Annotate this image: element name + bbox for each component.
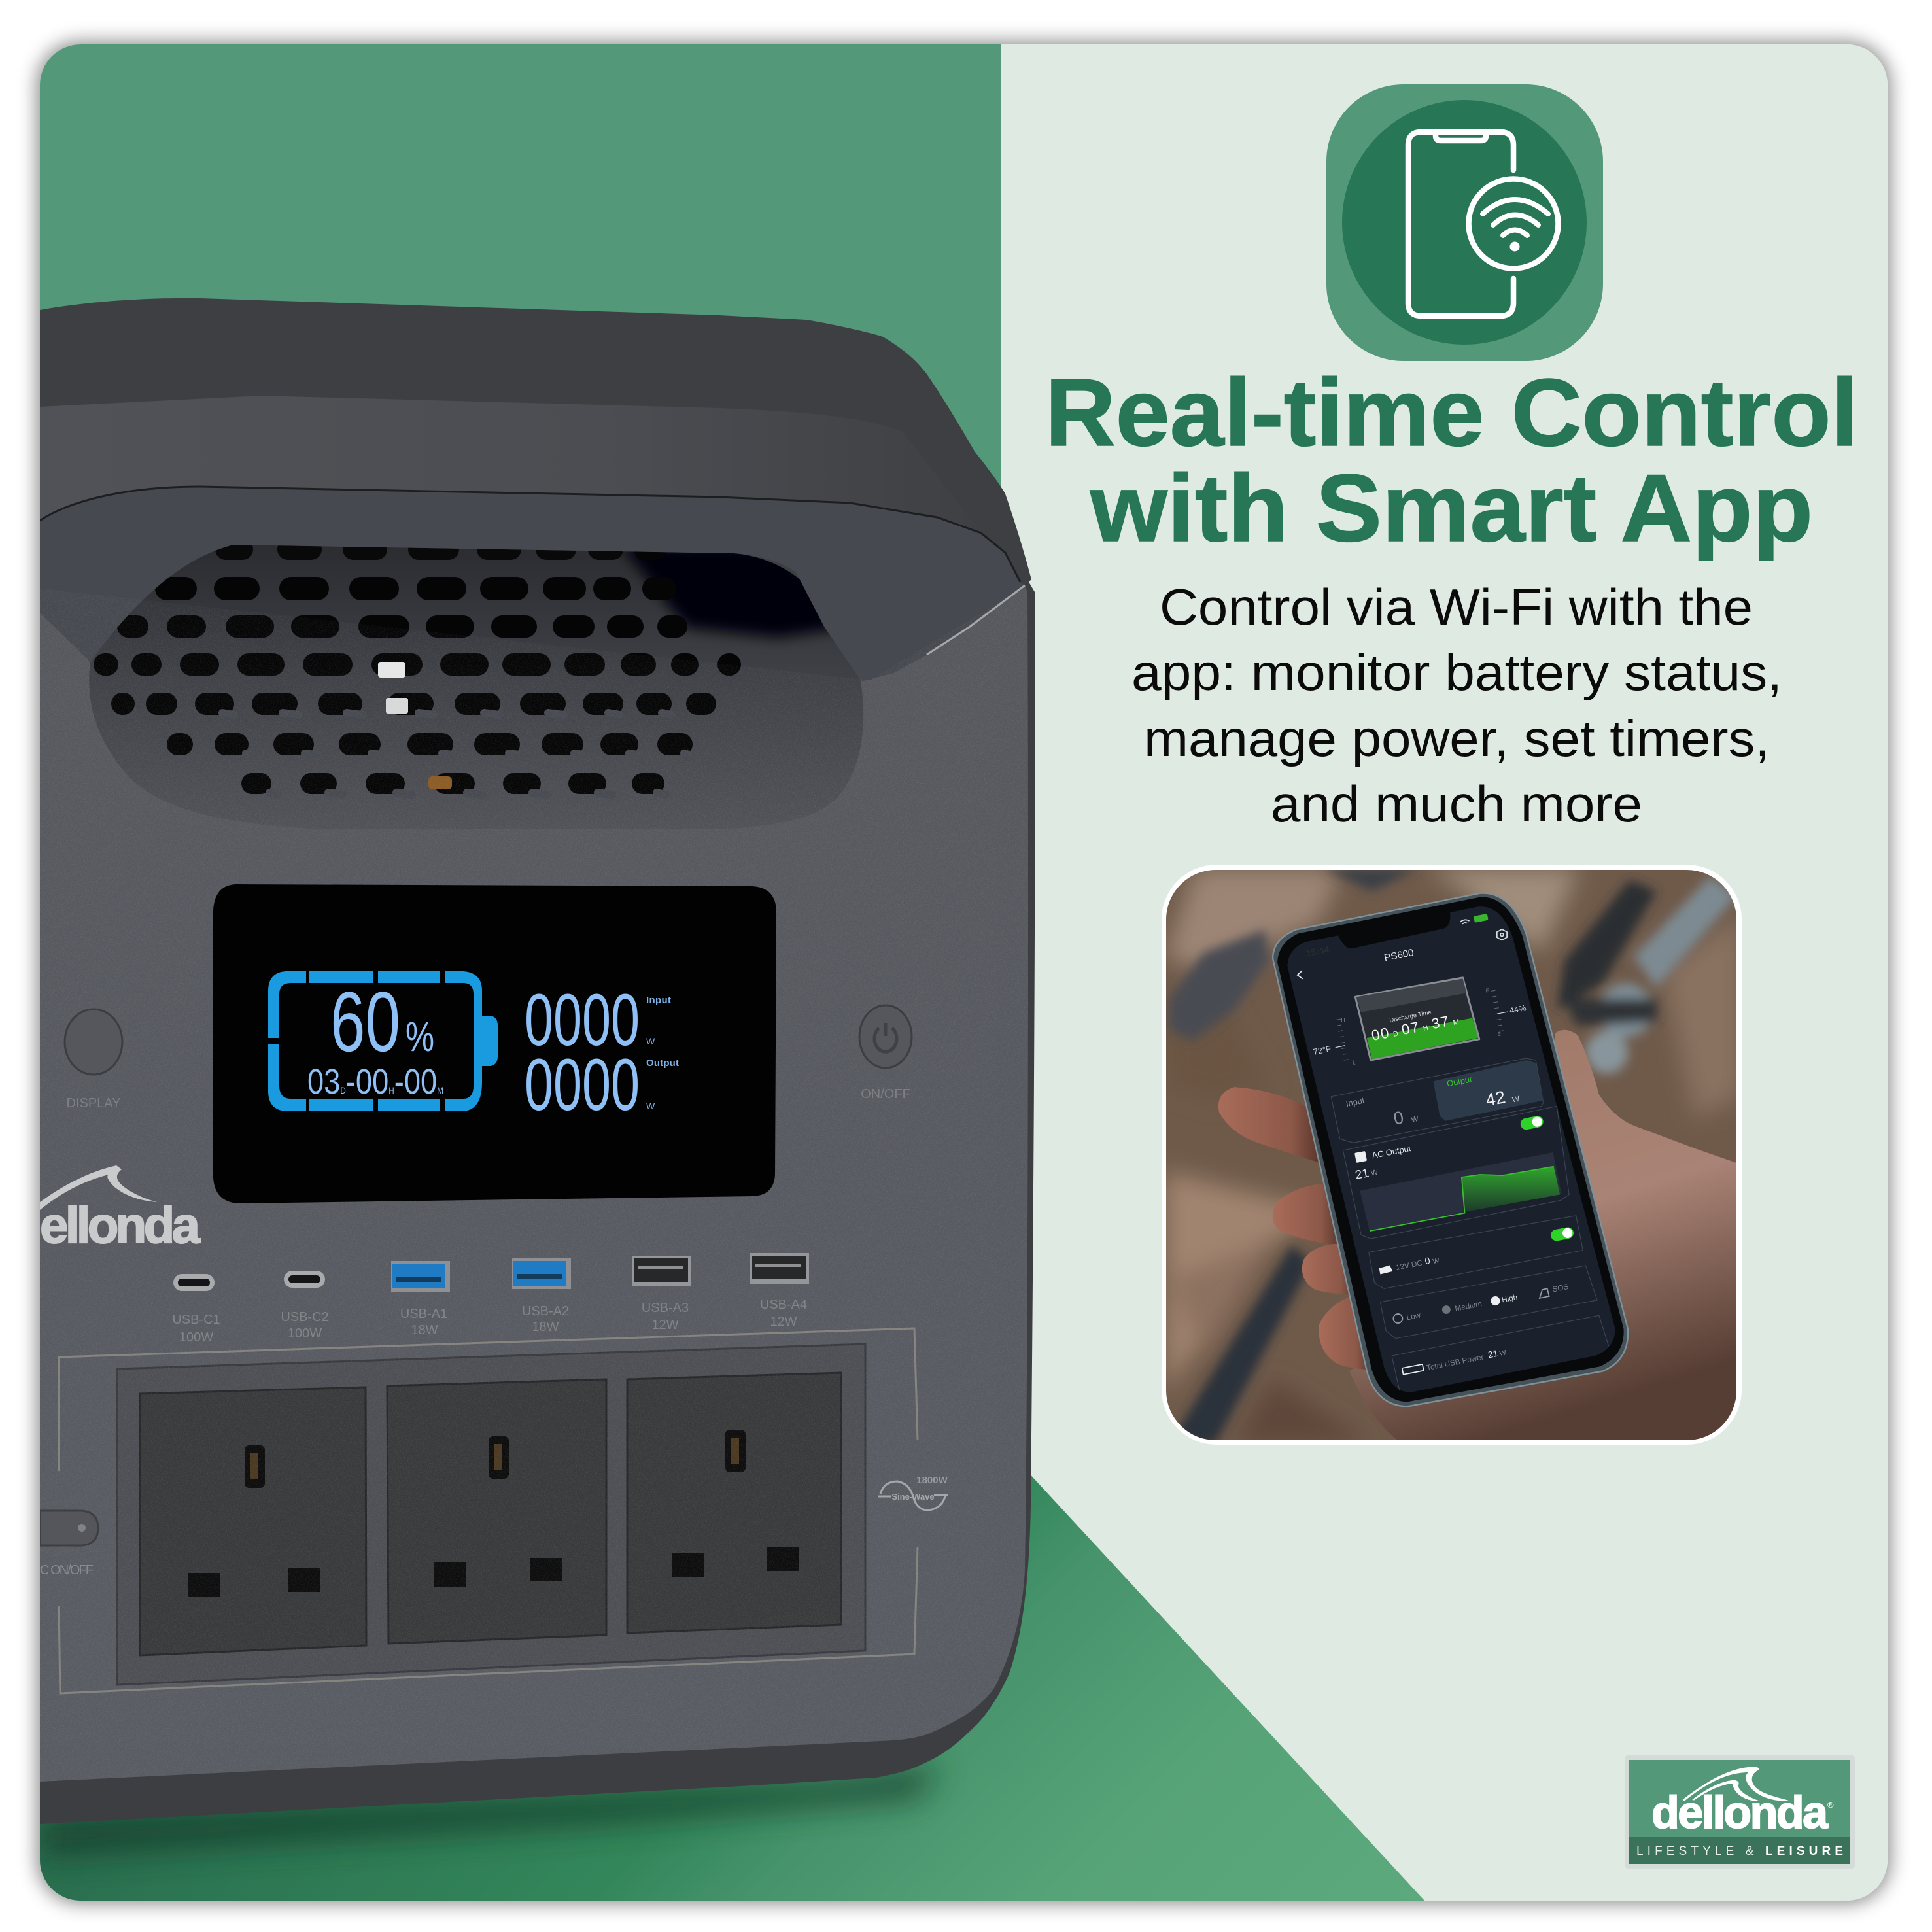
handle surround <box>40 487 1025 681</box>
LCD input reading: 0000 <box>525 979 640 1061</box>
socket 2 <box>387 1379 606 1644</box>
logo tagline: LIFESTYLE & LEISURE <box>1636 1844 1843 1858</box>
hand palm <box>1349 1030 1745 1444</box>
app input output card: W <box>1411 1114 1420 1124</box>
vent recess <box>89 545 863 818</box>
app light modes card: High <box>1501 1293 1518 1304</box>
app input output card <box>1331 1058 1544 1143</box>
phone frame <box>1273 893 1628 1406</box>
panel: pale background right <box>1001 44 1888 1901</box>
LCD percent: 60 <box>330 974 400 1069</box>
LCD remaining time: 03D-00H-00M <box>307 1062 443 1101</box>
app back chevron <box>1298 971 1303 979</box>
app status bar: 15:44 <box>1305 944 1330 959</box>
USB-C port 1 <box>173 1274 215 1291</box>
heading: Real-time Control <box>1045 359 1858 466</box>
handle edge highlight <box>927 585 1025 655</box>
icon: phone with wifi <box>1326 84 1603 361</box>
app temperature gauge <box>1313 1017 1356 1066</box>
photo frame <box>1162 865 1742 1445</box>
icon wifi dot <box>1509 242 1520 251</box>
USB port labels: USB-A2 <box>522 1304 569 1319</box>
USB-A port 3 black <box>632 1256 691 1286</box>
body text: app: monitor battery status, <box>1131 644 1782 701</box>
app input output card: 42 <box>1484 1087 1507 1110</box>
logo wordmark: dellonda <box>1651 1787 1829 1838</box>
USB-A port 4 black <box>750 1253 809 1284</box>
power button label: ON/OFF <box>861 1087 910 1101</box>
product shadow on ground <box>40 1766 942 1857</box>
LCD input unit: W <box>646 1036 655 1046</box>
LCD battery outline <box>268 971 482 1111</box>
app light modes card <box>1380 1266 1597 1339</box>
vent hole lit crescents <box>222 713 692 795</box>
app temperature gauge: 72°F <box>1313 1044 1332 1057</box>
finger 4 <box>1319 1294 1373 1370</box>
LCD output unit: W <box>646 1101 655 1111</box>
phone screen <box>1287 906 1615 1392</box>
device logo <box>40 1165 201 1254</box>
internal white part <box>378 662 405 678</box>
internal orange part <box>428 776 452 789</box>
USB-A port 2 blue <box>512 1258 571 1289</box>
app charge gauge: F <box>1486 988 1489 994</box>
app input output card: Input <box>1345 1095 1366 1109</box>
USB port labels: USB-A4 <box>760 1298 807 1312</box>
app input output card: 0 <box>1392 1107 1406 1129</box>
app input output card: Output <box>1446 1074 1473 1088</box>
app toggle 1 <box>1519 1115 1544 1131</box>
USB-A port 1 blue <box>391 1261 450 1292</box>
product top shell <box>40 298 1031 680</box>
logo wave <box>1683 1767 1789 1801</box>
app AC output card <box>1343 1106 1569 1239</box>
app settings icon <box>1497 929 1507 940</box>
app input output card: W <box>1511 1095 1521 1105</box>
phone bezel <box>1277 897 1624 1402</box>
USB port labels <box>172 1298 807 1345</box>
finger 1 <box>1218 1087 1322 1164</box>
app charge gauge <box>1486 988 1527 1037</box>
brand logo <box>1625 1755 1855 1869</box>
app USB power card <box>1392 1315 1609 1390</box>
power button <box>859 1005 912 1068</box>
LCD percent sign: % <box>405 1013 434 1060</box>
top shell lighter band <box>40 396 805 519</box>
panel: dark green diagonal corner <box>40 1475 1424 1901</box>
app USB power card: W <box>1499 1349 1507 1358</box>
USB port labels: USB-A3 <box>642 1301 689 1315</box>
product base silhouette and bottom band <box>40 576 1035 1824</box>
app charge gauge: 44% <box>1508 1003 1527 1016</box>
app AC output card: W <box>1370 1168 1379 1178</box>
internal white part lower <box>386 698 408 714</box>
app light modes card: Medium <box>1455 1300 1483 1313</box>
USB port labels: 100W <box>179 1330 213 1345</box>
LCD input label: Input <box>646 995 671 1006</box>
USB port labels: 12W <box>651 1318 679 1332</box>
panel: green background left <box>40 44 1001 1901</box>
app status bar <box>1305 914 1489 959</box>
icon badge background <box>1326 84 1603 361</box>
app USB power card: Total USB Power <box>1426 1353 1485 1372</box>
USB port labels: 100W <box>288 1326 322 1341</box>
app battery graphic: 00 D 07 H 37 M <box>1370 1011 1460 1044</box>
body text: Control via Wi-Fi with the <box>1160 578 1753 636</box>
app toggle 2 <box>1550 1226 1575 1242</box>
body text: and much more <box>1271 775 1642 833</box>
body text <box>1131 578 1782 833</box>
logo strip <box>1629 1837 1850 1864</box>
app USB power card: 21 <box>1487 1348 1499 1360</box>
logo panel <box>1629 1760 1850 1864</box>
blurred wooden background <box>1158 857 1759 1458</box>
LCD output reading: 0000 <box>525 1044 640 1126</box>
logo registered mark: ® <box>1827 1800 1834 1810</box>
app light modes card: Low <box>1406 1311 1422 1322</box>
body text: manage power, set timers, <box>1144 710 1770 767</box>
app title: PS600 <box>1383 947 1415 964</box>
handle seam line <box>40 487 1020 582</box>
USB-C port 2 <box>284 1271 325 1288</box>
USB port labels: USB-C2 <box>281 1310 329 1324</box>
USB port labels: 12W <box>770 1315 797 1329</box>
icon wifi arcs <box>1483 199 1548 235</box>
app battery graphic <box>1355 978 1479 1060</box>
socket 1 <box>140 1387 366 1655</box>
AC panel recess <box>117 1344 865 1685</box>
display button <box>65 1009 122 1075</box>
app temperature gauge: L <box>1353 1060 1356 1066</box>
display button label: DISPLAY <box>67 1096 120 1111</box>
vent holes <box>105 549 730 784</box>
app AC output card: 21 <box>1354 1165 1370 1182</box>
icon inner circle <box>1342 100 1587 345</box>
app light modes card: SOS <box>1552 1283 1570 1294</box>
sine wave badge: Sine-Wave <box>891 1492 935 1502</box>
LCD screen <box>213 884 776 1203</box>
app 12V DC card: W <box>1432 1256 1440 1266</box>
sine wave badge <box>878 1475 948 1510</box>
app AC output card: AC Output <box>1371 1143 1412 1160</box>
AC switch label: C ON/OFF <box>40 1563 94 1578</box>
AC panel thin outline <box>59 1328 918 1693</box>
finger 2 <box>1273 1183 1342 1245</box>
USB port labels: 18W <box>411 1323 438 1337</box>
sine wave badge: 1800W <box>916 1475 948 1486</box>
socket 3 <box>627 1373 841 1633</box>
device logo: ellonda <box>40 1196 201 1254</box>
USB port labels: USB-C1 <box>172 1313 220 1327</box>
icon phone outline <box>1408 132 1513 316</box>
app 12V DC card: 12V DC <box>1395 1258 1423 1272</box>
AC switch <box>40 1511 98 1545</box>
app 12V DC card: 0 <box>1424 1255 1431 1266</box>
app battery graphic: Discharge Time <box>1389 1009 1432 1024</box>
LCD battery terminal <box>482 1016 498 1066</box>
LCD output label: Output <box>646 1058 679 1069</box>
app temperature gauge: H <box>1341 1017 1345 1023</box>
USB port labels: USB-A1 <box>400 1307 447 1321</box>
product front face <box>40 587 1028 1782</box>
photo: hand holding phone with app <box>1158 857 1759 1458</box>
USB port labels: 18W <box>532 1320 559 1334</box>
finger 3 <box>1302 1243 1357 1294</box>
icon wifi circle <box>1469 179 1558 268</box>
heading <box>1045 359 1858 561</box>
app charge gauge: E <box>1497 1031 1501 1037</box>
app 12V DC card <box>1369 1216 1583 1288</box>
product: portable power station <box>40 298 1041 1824</box>
logo border <box>1625 1755 1855 1869</box>
heading: with Smart App <box>1090 455 1813 561</box>
